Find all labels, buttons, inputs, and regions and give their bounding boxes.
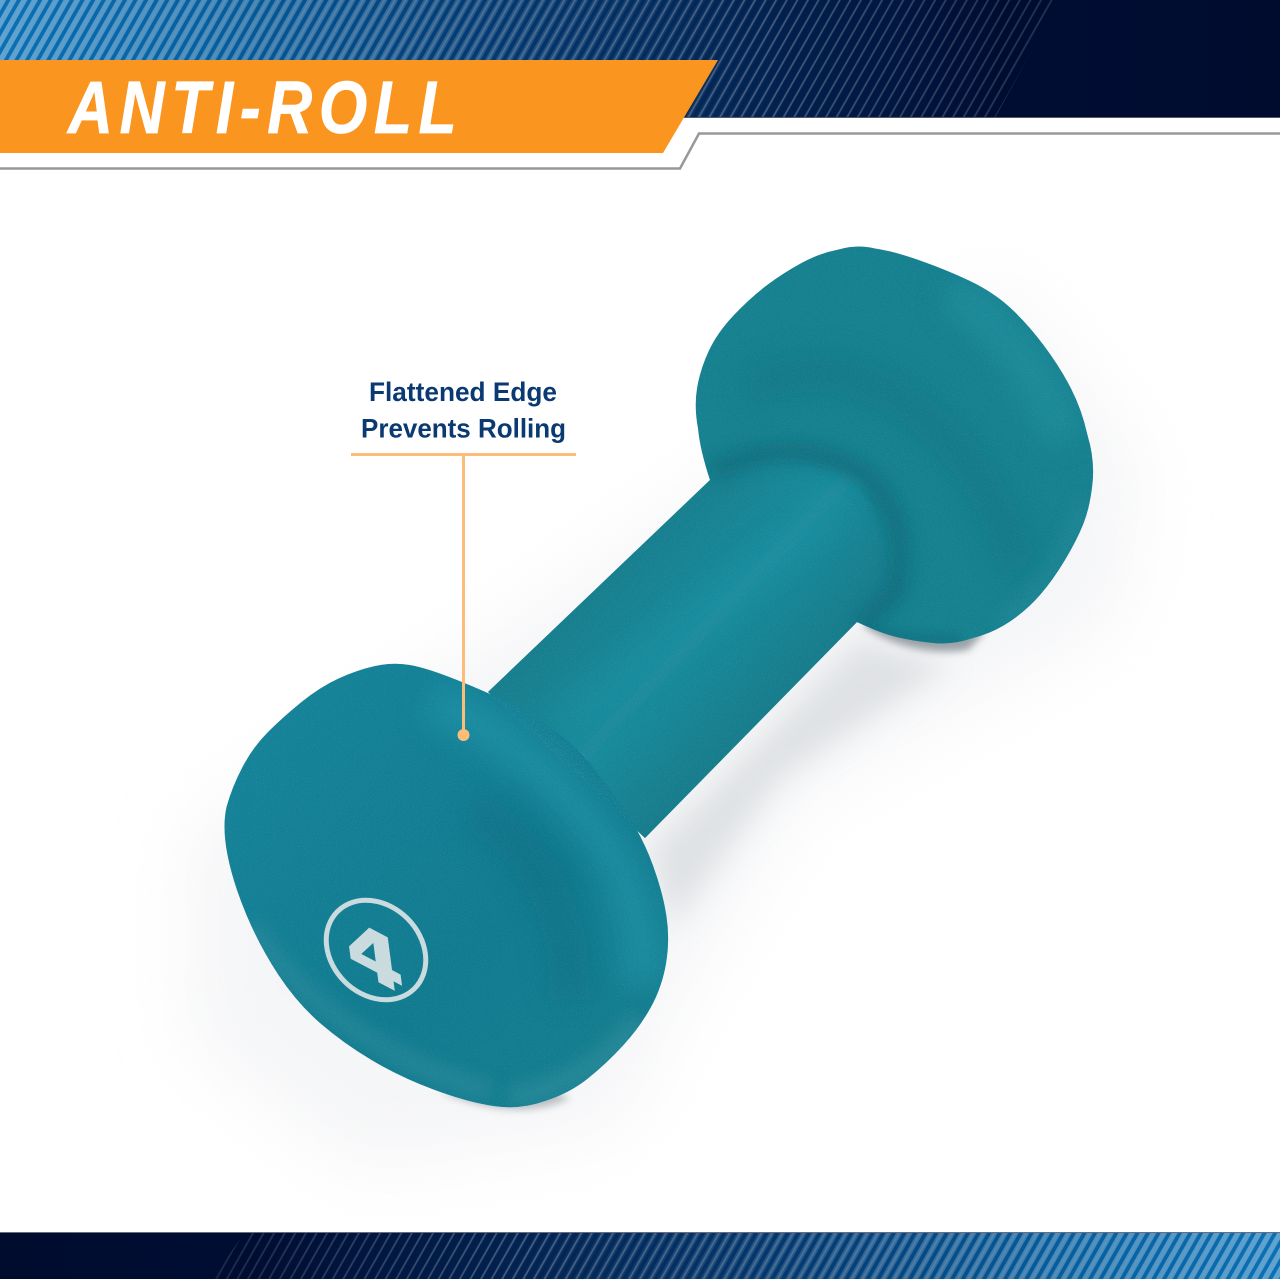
weight number badge: [306, 880, 446, 1020]
header grey rule: [0, 134, 1280, 168]
handle: [470, 452, 960, 850]
rear weight head: [696, 246, 1093, 643]
title: ANTI-ROLL: [66, 67, 463, 149]
callout text: Prevents Rolling: [361, 414, 566, 444]
top header band: [0, 0, 1280, 118]
floor shadow: [190, 280, 1140, 1170]
bottom footer band: [0, 1232, 1280, 1279]
weight number: 4: [340, 900, 408, 1013]
callout text: Flattened Edge: [369, 377, 557, 407]
callout: flattened edge: [351, 377, 576, 741]
front weight head: [224, 664, 668, 1107]
orange title banner: [0, 60, 718, 153]
callout leader line: [351, 453, 576, 741]
callout text: [361, 377, 566, 444]
dumbbell: [220, 240, 1100, 1115]
surface grain: [220, 660, 675, 1115]
